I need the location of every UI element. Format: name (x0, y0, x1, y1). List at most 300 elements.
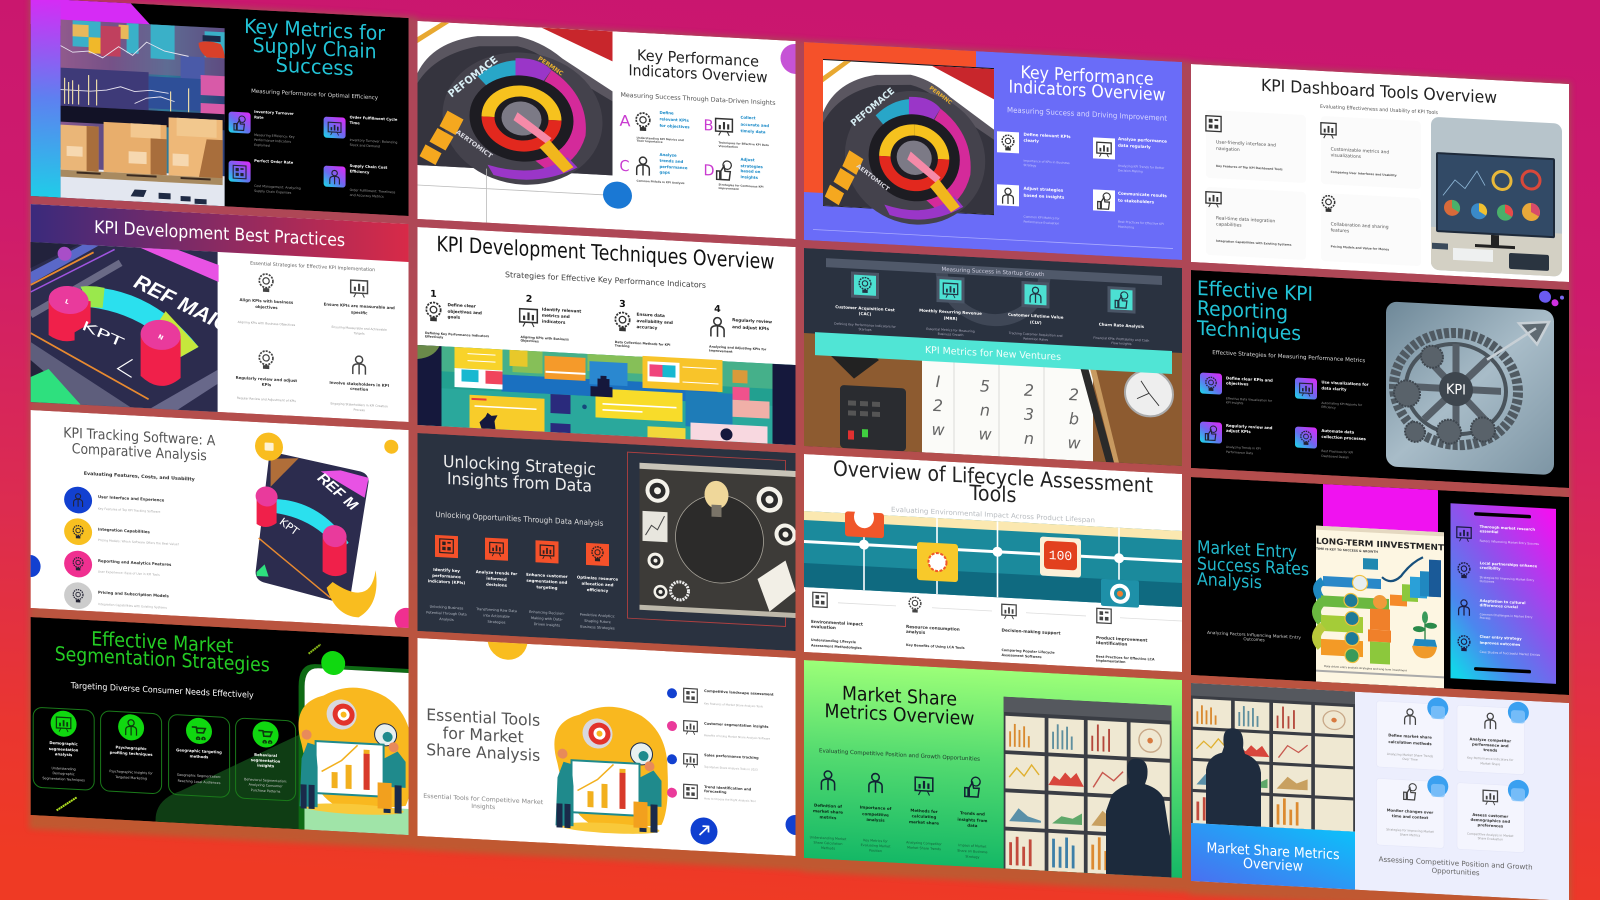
metric columns: Monthly Recurring Revenue (919, 308, 982, 316)
numbered techniques (425, 288, 772, 357)
tool list: Benefits of Using Market Share Analysis Software (704, 733, 771, 741)
segment cards: Understanding (51, 766, 76, 771)
metric columns: competitive (862, 811, 889, 818)
lettered KPI items: based on (740, 168, 761, 174)
tool list: Sales performance tracking (704, 753, 759, 760)
KPT dial image (30, 242, 219, 412)
numbered techniques: Regularly review (732, 317, 772, 324)
comparison list: Pricing Models: Which Software Offers the Best Value? (98, 538, 180, 546)
monitor photo (1431, 117, 1562, 277)
title block: Market Share Metrics (1206, 840, 1339, 863)
metric columns: market share (909, 819, 939, 826)
heading: Analysis (1197, 570, 1262, 593)
slide: Market Share Metrics Overview (green) (804, 660, 1182, 878)
heading: Metrics Overview (824, 700, 974, 730)
glass cards: Analyze competitor (1470, 736, 1511, 743)
subheading (423, 793, 544, 814)
segment cards: segmentation (251, 757, 281, 764)
feature cards: Integration Capabilities with Existing Systems (1216, 239, 1292, 247)
segment cards: Segmentation Techniques (42, 776, 85, 782)
numbered techniques: and adjust KPIs (732, 324, 769, 331)
slide: Market Entry Success Rates Analysis (1191, 477, 1569, 695)
lettered KPI items: Techniques for Effective KPI Data (718, 140, 769, 147)
metric columns: Market Share Trends (907, 845, 941, 851)
insight columns: informed (486, 576, 507, 582)
lettered KPI items: gaps (660, 169, 671, 175)
numbered techniques: goals (448, 314, 461, 320)
metric columns (810, 768, 988, 860)
title banner: KPI Development Best Practices (94, 218, 345, 251)
metric columns: Evaluating Market (861, 843, 891, 849)
slide: Key Metrics for Supply Chain Success: Performance Indicators (254, 138, 291, 144)
KPI items: Importance of KPIs in Business (1024, 159, 1070, 165)
heading: Market Entry (1197, 538, 1297, 563)
metric columns: analysis (866, 817, 885, 823)
tool list: Trend identification and (704, 785, 752, 792)
insight columns: Optimize resource (577, 574, 618, 582)
technique tiles (1200, 372, 1369, 461)
gauge image: AERTOMICT (855, 163, 891, 193)
gradient panel with success factors (1450, 503, 1556, 684)
segment cards: Reaching Local Audiences (178, 779, 221, 785)
slide: Key Metrics for Supply Chain Success: Cost Management: Analyzing (254, 184, 301, 190)
technique tiles: Performance Data (1226, 450, 1253, 455)
subheading: Analyzing Factors Influencing Market Entry (1207, 630, 1302, 640)
subheading: Measuring Success and Driving Improvement (1007, 105, 1167, 123)
slide: Key Metrics for Supply Chain Success (31, 0, 409, 216)
best-practice items: Targets (353, 331, 365, 336)
heading: Key Performance (1020, 63, 1154, 90)
slide: Key Performance Indicators Overview (purple) (804, 42, 1182, 260)
four tool columns: Assessment Methodologies (811, 643, 862, 650)
lettered KPI items: Adjust (740, 157, 755, 162)
feature cards: Pricing Models and Value for Money (1331, 244, 1389, 252)
heading: Indicators Overview (628, 61, 768, 87)
gradient panel with success factors: improves outcomes (1480, 641, 1521, 647)
heading (426, 705, 540, 765)
slide: Key Metrics for Supply Chain Success: Supply Chain Expenses (254, 189, 292, 195)
top bar (826, 258, 1162, 329)
slide: Key Performance Indicators Overview (white) (418, 21, 810, 240)
numbered techniques: indicators (542, 319, 566, 325)
metric cards: Supply Chain Cost (350, 164, 388, 170)
insight columns: Driven Insights (534, 622, 560, 628)
glass cards: Analyzing Market Share Trends (1387, 752, 1434, 758)
metric columns: data (967, 823, 978, 828)
slide: Overview of Lifecycle Assessment Tools (804, 454, 1182, 672)
technique tiles: Analyzing Trends in KPI (1226, 445, 1261, 451)
heading: Reporting (1197, 296, 1288, 325)
feature cards: Real-time data integration (1216, 215, 1275, 224)
subheading: Unlocking Opportunities Through Data Analysis (435, 510, 604, 528)
heading: Tools (969, 480, 1016, 507)
glass cards: calculation methods (1388, 739, 1432, 746)
glass cards: Competitive Analysis in Market (1467, 832, 1514, 838)
heading (1197, 538, 1309, 596)
tool list (667, 687, 774, 804)
numbered techniques: Tracking (615, 343, 630, 348)
gradient panel with success factors: Factors Influencing Market Entry Success (1480, 539, 1539, 546)
tool list: forecasting (704, 789, 727, 794)
subheading: Opportunities (1432, 867, 1480, 877)
insight columns: Shaping Future (584, 619, 611, 624)
technique tiles: Automating KPI Reports for (1321, 401, 1363, 407)
segment cards: methods (190, 753, 209, 759)
technique tiles: objectives (1226, 380, 1249, 387)
slide: KPI Tracking Software (21, 409, 419, 633)
lettered KPI items: Strategies for Continuous KPI (718, 182, 764, 189)
gradient panel with success factors: Clear entry strategy (1480, 635, 1522, 641)
segment cards: Purchase Patterns (251, 788, 281, 794)
lettered KPI items: timely data (740, 128, 766, 134)
comparison list: Key Features of Top KPI Tracking Software (98, 507, 160, 514)
illustration panel (298, 649, 412, 835)
segment cards: Psychographic Insights for (109, 769, 153, 776)
technique tiles: Regularly review and (1226, 423, 1273, 430)
desk photo: 5 (980, 376, 990, 396)
KPI items: Monitoring (1118, 225, 1134, 229)
gauge image: PEFOMACE (446, 54, 501, 100)
long-term investment poster: TIME IS KEY TO SUCCESS & GROWTH (1316, 547, 1378, 554)
best-practice items: Involve stakeholders in KPI (329, 380, 390, 388)
metric columns: Methods for (910, 808, 938, 814)
long-term investment poster: LONG-TERM IINVESTMENT (1316, 536, 1444, 552)
numbered techniques: availability and (636, 318, 673, 325)
best-practice items (236, 272, 395, 414)
numbered techniques: 1 (430, 289, 437, 300)
lettered KPI items: accurate and (740, 122, 769, 128)
slide: Key Metrics for Supply Chain Success: Measuring Efficiency: Key (254, 133, 295, 139)
desk photo: w (978, 424, 992, 444)
segment cards: segmentation (49, 746, 79, 753)
technique tiles: Best Practices for KPI (1321, 449, 1353, 455)
subheading: Effective Strategies for Measuring Performance Metrics (1212, 350, 1365, 364)
gradient panel with success factors: Thorough market research (1480, 525, 1535, 532)
insight columns: Identify key (433, 567, 460, 573)
gauge image (823, 59, 994, 229)
lettered KPI items: Common Pitfalls in KPI Analysis (636, 179, 685, 185)
comparison list: User Experience: Ease of Use in KPI Tools (98, 570, 160, 577)
numbered techniques: Objectives (520, 338, 539, 343)
timeline illustration (804, 503, 1182, 610)
best-practice items: creation (350, 386, 368, 392)
metric cards: Rate (254, 115, 264, 120)
insight columns: indicators (KPIs) (428, 578, 465, 585)
desk photo: 2 (1069, 385, 1079, 405)
gauge image: PERMNC (928, 85, 953, 106)
desk photo: w (1067, 433, 1081, 453)
glass cards: Share Evaluation (1478, 836, 1503, 842)
metric columns: Understanding Market (810, 835, 847, 841)
segment cards: Behavioral (254, 752, 277, 758)
insight columns: efficiency (587, 587, 609, 593)
lettered KPI items: insights (740, 174, 759, 180)
lettered KPI items: strategies (740, 163, 763, 169)
lettered KPI items: Analyze (660, 152, 677, 158)
metric columns: calculating (912, 813, 936, 820)
heading (1196, 276, 1313, 346)
four tool columns: analysis (906, 629, 926, 635)
gradient panel with success factors: Strategies for Improving Market Entry (1480, 575, 1534, 582)
metric columns: Flow Insights (1111, 341, 1132, 346)
glass cards: Define market share (1388, 732, 1432, 740)
feature cards: Customizable metrics and (1331, 146, 1389, 156)
desk photo: 3 (1024, 405, 1034, 424)
subheading: Insights (471, 803, 495, 811)
subheading: Evaluating Competitive Position and Growth Opportunities (819, 748, 980, 763)
best-practice items: Regular Review and Adjustment of KPIs (237, 396, 296, 403)
metric columns: Tracking Customer Acquisition and (1008, 331, 1063, 338)
tool list: Top Market Share Analysis Tools in 2023 (703, 765, 758, 772)
four tool columns: Assessment Software (1002, 653, 1042, 659)
metric columns: metrics (820, 814, 837, 820)
insight columns: segmentation and (526, 578, 568, 585)
four tool columns: evaluation (811, 624, 836, 630)
lettered KPI items (620, 108, 769, 193)
KPT dial image: KPT (79, 319, 126, 351)
numbered techniques: 3 (619, 299, 626, 310)
best-practice items: Ensuring Measurable and Achievable (331, 325, 387, 332)
slide: Key Metrics for Supply Chain Success: Inventory Turnover: Balancing (350, 138, 397, 144)
heading: Supply Chain (253, 33, 377, 63)
insight columns: Potential Through Data (426, 610, 467, 617)
gauge image (418, 21, 612, 189)
technique tiles: Automate data (1321, 428, 1354, 435)
segment cards: Geographic Segmentation: (177, 773, 221, 779)
metric cards: Perfect Order Rate (254, 159, 294, 165)
heading: KPI Development Techniques Overview (436, 231, 774, 274)
four tool columns: identification (1096, 640, 1127, 647)
slide: KPI Metrics for New Ventures (804, 248, 1182, 466)
metric columns: Retention Rates (1023, 337, 1048, 342)
lightbulb image with red frame (628, 452, 796, 627)
feature cards: Collaboration and sharing (1331, 221, 1389, 230)
timeline illustration: 100 (1049, 548, 1072, 564)
feature cards: capabilities (1216, 221, 1242, 229)
four tool columns: Environmental impact (811, 619, 863, 627)
heading (1010, 65, 1165, 100)
decorative dots (1539, 290, 1564, 307)
metric columns: Defining Key Performance Indicators for (834, 322, 897, 329)
technique tiles: Define clear KPIs and (1226, 375, 1273, 383)
glass cards (1376, 694, 1529, 853)
slide: KPI Development Techniques Overview (418, 227, 796, 445)
heading (833, 456, 1153, 514)
metric columns: Customer Lifetime Value (1008, 312, 1064, 320)
technique tiles: Effective Data Visualization for (1226, 396, 1273, 403)
KPI items: clearly (1024, 138, 1039, 143)
metric columns: Definition of (814, 803, 842, 809)
heading: KPI Dashboard Tools Overview (1261, 76, 1497, 107)
KPI items: Performance Evaluation (1024, 220, 1059, 226)
numbered techniques: Analyzing and Adjusting KPIs for (709, 344, 767, 352)
gauge image: AERTOMICT (454, 128, 494, 160)
comparison list: Integration Capabilities with Existing Systems (98, 602, 167, 610)
insight columns (426, 534, 618, 631)
feature cards: features (1331, 227, 1350, 234)
lettered KPI items: A (620, 112, 631, 130)
insight columns: Transforming Raw Data (475, 607, 517, 613)
desk photo (804, 333, 1182, 466)
heading: Techniques (1196, 316, 1301, 345)
metric columns: Churn Rate Analysis (1099, 322, 1145, 329)
slide: Key Metrics for Supply Chain Success: and Accuracy Metrics (350, 193, 384, 199)
insight columns: Analyze trends for (476, 569, 517, 576)
KPI items: Analyzing KPI Trends for Better (1118, 164, 1165, 170)
numbered techniques: Aligning KPIs with Business (520, 335, 569, 342)
gradient panel with success factors: Outcomes (1480, 579, 1495, 584)
metric cards (229, 108, 398, 190)
numbered techniques: 4 (714, 304, 721, 315)
heading: Essential Tools (426, 705, 540, 730)
gradient panel with success factors: Case Studies of Successful Market Entries (1480, 650, 1541, 657)
KPT dial image: REF MAIC (131, 270, 234, 338)
best-practice items: Engaging Stakeholders in KPI Creation (330, 401, 388, 408)
best-practice items: Process (354, 408, 365, 412)
metric columns: Position (869, 848, 882, 853)
heading: Overview of Lifecycle Assessment (833, 456, 1153, 497)
metric cards: Order Fulfillment Cycle (350, 115, 398, 122)
numbered techniques: Effectively (425, 334, 443, 339)
tool list: How to Choose the Right Analysis Tool (704, 796, 756, 803)
subheading: Essential Strategies for Effective KPI Implementation (250, 261, 375, 273)
four tool columns: Product improvement (1096, 635, 1147, 643)
insight columns: Strategies (488, 620, 506, 625)
squiggle accents (57, 630, 321, 824)
subheading (1379, 855, 1533, 880)
heading: Unlocking Strategic (443, 452, 596, 479)
heading: Market Share (842, 683, 957, 711)
numbered techniques: Define clear (448, 302, 477, 309)
teal banner (815, 332, 1172, 374)
slide: Effective Market Segmentation Strategies (31, 617, 412, 835)
tool list: Customer segmentation insights (704, 722, 768, 729)
slide: Market Share Metrics Overview (lavender) (1191, 683, 1569, 900)
KPI items: based on insights (1024, 193, 1065, 200)
segment cards: Analyzing Consumer (249, 783, 283, 788)
heading (443, 452, 596, 496)
lettered KPI items: Collect (740, 115, 756, 120)
desk photo: 2 (933, 396, 943, 415)
segment cards: profiling techniques (110, 750, 153, 757)
KPI items: Communicate results (1118, 191, 1167, 198)
accents (21, 419, 419, 633)
insight columns: Unlocking Business (430, 605, 464, 610)
heading: Success (276, 52, 354, 81)
glass cards: demographics and (1471, 817, 1510, 824)
lettered KPI items: performance (660, 164, 688, 170)
segment cards: insights (257, 763, 275, 768)
subheading: Evaluating Environmental Impact Across Product Lifespan (891, 506, 1095, 524)
glass cards: preferences (1477, 822, 1504, 829)
metric columns: Business Growth (938, 332, 963, 337)
heading (63, 425, 216, 465)
slide: KPI Development Best Practices (31, 204, 409, 427)
subheading (1207, 630, 1302, 644)
subheading: Measuring Success Through Data-Driven Insights (620, 92, 776, 107)
subheading: Measuring Performance for Optimal Efficiency (251, 89, 379, 101)
gradient panel with success factors: credibility (1480, 566, 1501, 571)
tilted KPT dial card: KPT (277, 515, 301, 538)
KPI items: Strategy (1024, 163, 1037, 168)
desk photo: b (1069, 409, 1079, 429)
four tool columns: Implementation (1096, 658, 1126, 664)
metric columns: (CLV) (1030, 319, 1042, 325)
KPI items: data regularly (1118, 143, 1151, 149)
best-practice items: Align KPIs with business (240, 297, 294, 305)
technique tiles: collection processes (1321, 434, 1367, 441)
feature cards (1205, 115, 1397, 251)
analyst photo (1191, 683, 1355, 832)
title block: Overview (1243, 856, 1303, 875)
comparison list: Reporting and Analytics Features (98, 558, 172, 567)
metric columns (834, 271, 1149, 347)
segment cards: Demographic (49, 740, 78, 747)
subheading: Essential Tools for Competitive Market (423, 793, 544, 806)
subheading: Strategies for Effective Key Performance Indicators (505, 270, 706, 290)
segment cards: Psychographic (116, 745, 147, 751)
insight columns: targeting (536, 584, 558, 590)
metric cards: Inventory Turnover (254, 110, 294, 116)
four tool columns: Understanding Lifecycle (811, 638, 857, 644)
metric columns: Trends and (960, 810, 985, 817)
arrow button (690, 817, 718, 845)
gradient panel with success factors: Local partnerships enhance (1480, 561, 1538, 568)
subheading: Evaluating Effectiveness and Usability of KPI Tools (1320, 104, 1438, 116)
technique tiles: data clarity (1321, 385, 1347, 392)
insight columns: Analysis (439, 617, 454, 622)
desk photo: 2 (1024, 381, 1034, 400)
gears image (1386, 301, 1554, 475)
gauge image: PERMNC (536, 55, 565, 78)
glass cards: Key Performance Indicators for (1467, 756, 1514, 762)
lettered KPI items: for objectives (660, 123, 690, 129)
gears image: KPI (1446, 382, 1466, 399)
gradient panel with success factors: Process (1480, 616, 1491, 620)
best-practice items: Regularly review and adjust (236, 375, 297, 383)
segment cards (33, 707, 296, 801)
heading: Effective KPI (1197, 276, 1313, 306)
feature cards: navigation (1216, 146, 1240, 153)
insight columns: allocation and (582, 581, 614, 587)
lettered KPI items: D (704, 161, 714, 180)
long-term investment poster (1316, 526, 1444, 688)
four tool columns: Best Practices for Effective LCA (1096, 654, 1155, 662)
gradient panel with success factors: Adaptation to cultural (1480, 599, 1526, 605)
heading (55, 625, 270, 677)
heading: Indicators Overview (1008, 77, 1166, 106)
best-practice items: Ensure KPIs are measurable and (324, 302, 395, 310)
feature cards: User-friendly interface and (1216, 139, 1276, 149)
technique tiles: Efficiency (1321, 405, 1336, 410)
subheading: Targeting Diverse Consumer Needs Effectively (70, 680, 254, 700)
lettered KPI items: Understanding KPI Metrics and (636, 136, 684, 142)
segment cards: Geographic targeting (176, 747, 222, 755)
metric columns: Startups (858, 327, 872, 332)
KPI items: Best Practices for Effective KPI (1118, 220, 1164, 226)
insight columns: performance (432, 573, 461, 579)
numbered techniques: accuracy (636, 324, 658, 330)
KPI items: Analyze performance (1118, 136, 1167, 144)
numbered techniques: 2 (526, 294, 532, 305)
illustration (554, 704, 668, 836)
best-practice items: KPIs (262, 382, 272, 387)
four tool columns: Decision-making support (1002, 627, 1060, 636)
insight columns: Enhance customer (526, 572, 568, 579)
desk photo: n (980, 400, 990, 420)
best-practice items: Aligning KPIs with Business Objectives (238, 320, 296, 327)
metric columns: Key Metrics for (863, 838, 888, 843)
